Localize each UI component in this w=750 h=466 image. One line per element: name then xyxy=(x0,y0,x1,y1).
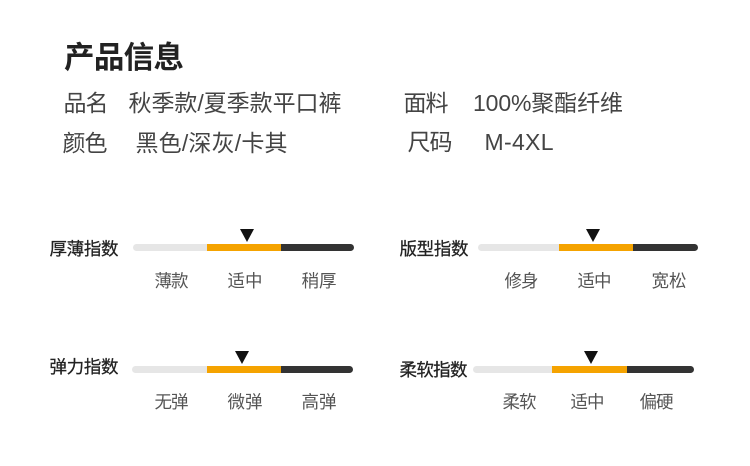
label: fit index: 版型指数 xyxy=(400,239,468,259)
title: 产品信息 xyxy=(64,41,184,75)
text: name label: 品名 xyxy=(64,90,108,116)
scale labels: 柔软 xyxy=(502,392,536,412)
label: thickness index: 厚薄指数 xyxy=(50,239,118,259)
panel: softness index xyxy=(400,351,694,412)
panel: fit index xyxy=(400,229,698,291)
text: size label: 尺码 xyxy=(408,129,452,155)
text: fabric label: 面料 xyxy=(404,90,448,116)
icon: pointer xyxy=(235,351,249,364)
scale labels: 微弹 xyxy=(228,392,262,412)
icon: pointer xyxy=(584,351,598,364)
scale labels: 无弹 xyxy=(154,392,188,412)
scale bar xyxy=(478,244,698,251)
scale labels: 适中 xyxy=(578,271,612,291)
panel: elasticity index xyxy=(50,351,353,412)
icon: pointer xyxy=(240,229,254,242)
scale labels: 适中 xyxy=(228,271,262,291)
text: colour value: 黑色/深灰/卡其 xyxy=(136,130,288,156)
scale labels: 高弹 xyxy=(302,392,336,412)
scale bar xyxy=(473,366,694,373)
scale labels xyxy=(504,271,686,291)
icon: pointer xyxy=(586,229,600,242)
text: name value: 秋季款/夏季款平口裤 xyxy=(128,90,342,116)
text: size value: M-4XL xyxy=(484,129,554,155)
label: elasticity index: 弹力指数 xyxy=(50,357,118,377)
text: colour label: 颜色 xyxy=(62,130,108,156)
scale labels: 偏硬 xyxy=(640,392,674,412)
panel: product details xyxy=(62,90,623,156)
scale labels: 宽松 xyxy=(652,271,686,291)
text: fabric value: 100%聚酯纤维 xyxy=(473,90,623,116)
scale labels xyxy=(154,271,336,291)
scale labels xyxy=(154,392,336,412)
label: softness index: 柔软指数 xyxy=(400,360,468,380)
scale labels: 薄款 xyxy=(154,271,188,291)
scale labels: 稍厚 xyxy=(302,271,336,291)
scale bar xyxy=(133,244,354,251)
scale bar xyxy=(132,366,353,373)
scale labels: 修身 xyxy=(504,271,538,291)
panel: thickness index xyxy=(50,229,354,291)
scale labels xyxy=(502,392,674,412)
scale labels: 适中 xyxy=(570,392,604,412)
